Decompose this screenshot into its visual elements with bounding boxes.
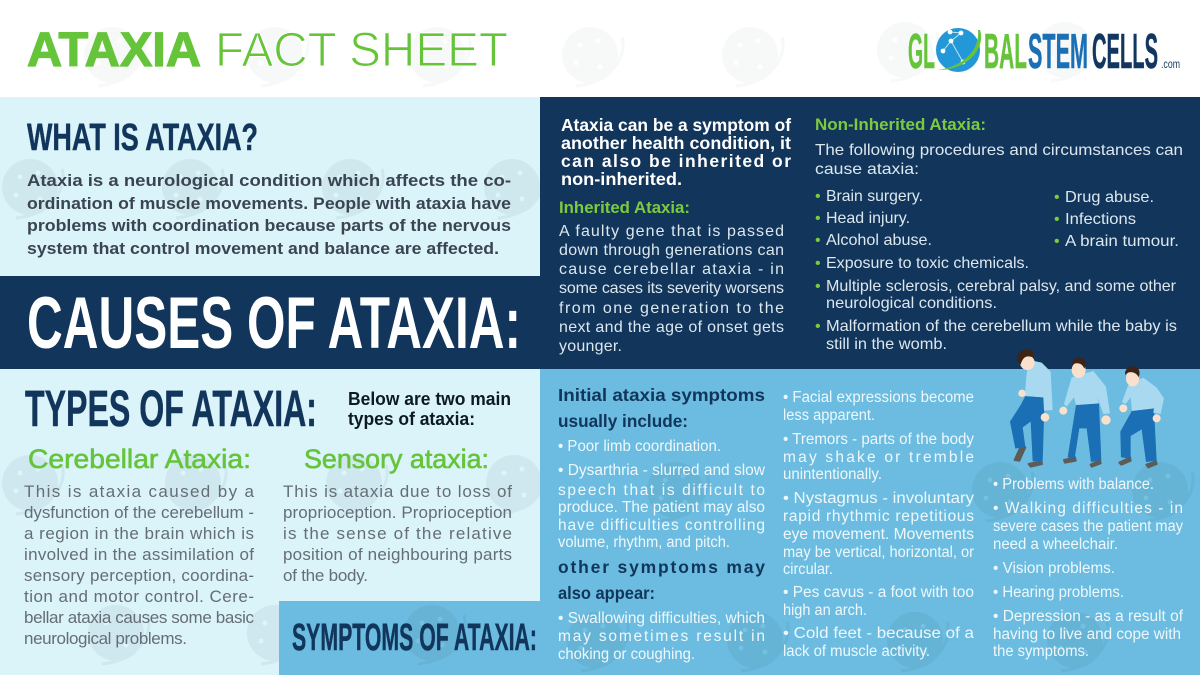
text: inherited ataxia: younger. [559,338,622,355]
list: other symptoms column two: • Cold feet - because of a [783,625,974,642]
text: cerebellar ataxia: neurological problems. [24,629,187,648]
title: ATAXIA [27,24,201,77]
list: other symptoms column three: the symptoms. [993,643,1089,660]
heading: causes of ataxia: CAUSES OF ATAXIA: [27,283,521,364]
text: definition: Ataxia is a neurological condition which affects the co- [27,171,511,190]
list: non-inherited causes: Drug abuse. [1065,189,1154,206]
illustration: three people with balance problems [1010,349,1164,467]
heading: cerebellar ataxia: Cerebellar Ataxia: [28,444,251,474]
list: initial symptoms [558,438,766,551]
text: definition [27,171,511,258]
logo: Global Stem Cells: GL [908,25,935,79]
text: definition: problems with coordination because parts of the nervous [27,216,511,235]
list: non-inherited causes: Alcohol abuse. [826,232,932,249]
heading: symptoms of ataxia: SYMPTOMS OF ATAXIA: [292,617,537,659]
text: inherited ataxia: next and the age of onset gets [559,319,784,336]
heading: initial symptoms: Initial ataxia symptoms [558,385,765,405]
text: cerebellar ataxia: sensory perception, coordina- [24,566,254,585]
heading: non-inherited ataxia: Non-Inherited Ataxia: [815,115,986,134]
logo: Global Stem Cells: .com [1161,57,1180,71]
text: intro: can also be inherited or [561,151,791,171]
list: other symptoms column two: high an arch. [783,602,867,619]
list: other symptoms column two: may shake or tremble [783,449,974,466]
heading: types of ataxia: TYPES OF ATAXIA: [25,380,317,437]
heading: other symptoms [558,557,765,603]
heading: inherited ataxia: Inherited Ataxia: [559,198,690,217]
text: sensory ataxia: This is ataxia due to loss of [283,482,512,501]
text: cerebellar ataxia: tion and motor control. Cere- [24,587,254,606]
list: other symptoms column two: • Nystagmus - involuntary [783,490,974,507]
list: other symptoms column two: • Tremors - parts of the body [783,431,974,448]
panel: symptoms heading [279,601,541,675]
text: definition: system that control movement and balance are affected. [27,239,499,258]
list: initial symptoms: have difficulties controlling [558,517,765,534]
list: non-inherited causes: Head injury. [826,210,910,227]
list: initial symptoms: • Dysarthria - slurred and slow [558,462,766,479]
list: other symptoms column three: having to live and cope with [993,626,1181,643]
list: non-inherited causes: Exposure to toxic chemicals. [826,255,1029,272]
heading: initial symptoms: usually include: [558,411,688,431]
list: non-inherited causes: still in the womb. [826,336,947,353]
logo: Global Stem Cells [908,25,1180,79]
text: inherited ataxia: cause cerebellar ataxia - in [559,261,784,278]
list: other symptoms column two: • Facial expressions become [783,389,974,406]
list: other symptoms column three: severe cases the patient may [993,518,1183,535]
text: non-inherited intro: The following procedures and circumstances can [815,142,1183,159]
text: two main types: types of ataxia: [348,409,475,429]
list: other symptoms column two: unintentionally. [783,466,882,483]
text: sensory ataxia: is the sense of the relative [283,524,512,543]
list: non-inherited causes [815,188,1179,353]
list: other symptoms column two: rapid rhythmic repetitious [783,508,974,525]
list: other symptoms column three: • Walking difficulties - in [993,500,1183,517]
heading: initial symptoms [558,385,765,431]
panel: causes of ataxia banner [0,276,541,369]
text: cerebellar ataxia: dysfunction of the cerebellum - [24,503,254,522]
list: other symptoms column one [558,610,765,663]
text: intro [561,115,791,189]
list: other symptoms column three: • Vision problems. [993,560,1115,577]
panel: header [0,0,1200,97]
list: other symptoms column three: need a wheelchair. [993,536,1118,553]
panel: what is ataxia [0,97,545,276]
text: inherited ataxia: down through generations can [559,242,784,259]
list: non-inherited causes: • [815,278,821,295]
list: initial symptoms: produce. The patient may also [558,499,765,516]
list: initial symptoms: speech that is difficult to [558,482,765,499]
list: other symptoms column two: • Pes cavus - a foot with too [783,584,974,601]
heading: other symptoms: other symptoms may [558,557,765,577]
list: other symptoms column three [993,476,1184,660]
list: non-inherited causes: • [815,188,821,205]
title: FACT SHEET [215,24,508,77]
list: other symptoms column three: • Problems with balance. [993,476,1154,493]
list: other symptoms column three: • Depression - as a result of [993,608,1184,625]
text: intro: Ataxia can be a symptom of [561,115,791,135]
list: initial symptoms: volume, rhythm, and pitch. [558,534,730,551]
figure: third person [1119,366,1164,467]
heading: what is ataxia: WHAT IS ATAXIA? [27,117,258,159]
list: non-inherited causes: • [1054,211,1060,228]
text: two main types: Below are two main [348,389,511,409]
figure: second person [1059,358,1111,467]
text: inherited ataxia [559,223,784,355]
text: intro: non-inherited. [561,169,682,189]
text: cerebellar ataxia: bellar ataxia causes some basic [24,608,254,627]
list: other symptoms column three: • Hearing problems. [993,584,1124,601]
text: inherited ataxia: from one generation to the [559,300,784,317]
list: other symptoms column two: may be vertical, horizontal, or [783,544,974,561]
text: cerebellar ataxia: a region in the brain which is [24,524,254,543]
text: intro: another health condition, it [561,133,791,153]
list: other symptoms column one: may sometimes result in [558,628,765,645]
list: non-inherited causes: Malformation of the cerebellum while the baby is [826,318,1177,335]
list: non-inherited causes: • [1054,233,1060,250]
list: non-inherited causes: Multiple sclerosis, cerebral palsy, and some other [826,278,1177,295]
text: cerebellar ataxia: involved in the assimilation of [24,545,254,564]
list: other symptoms column one: • Swallowing difficulties, which [558,610,765,627]
list: other symptoms column two: eye movement. Movements [783,526,974,543]
logo: Global Stem Cells: BAL [984,25,1027,79]
list: non-inherited causes: • [815,255,821,272]
figure: first person [1010,349,1053,467]
list: non-inherited causes: Brain surgery. [826,188,923,205]
list: non-inherited causes: Infections [1065,211,1136,228]
heading: other symptoms: also appear: [558,583,655,603]
text: sensory ataxia: of the body. [283,566,368,585]
text: non-inherited intro [815,142,1183,178]
text: cerebellar ataxia [24,482,255,648]
heading: sensory ataxia: Sensory ataxia: [304,444,489,474]
list: initial symptoms: • Poor limb coordination. [558,438,721,455]
list: non-inherited causes: • [815,232,821,249]
text: definition: ordination of muscle movements. People with ataxia have [27,194,511,213]
list: non-inherited causes: A brain tumour. [1065,233,1179,250]
text: two main types [348,389,511,429]
list: non-inherited causes: • [815,318,821,335]
title [27,24,508,77]
list: non-inherited causes: • [1054,189,1060,206]
list: other symptoms column two: circular. [783,561,833,578]
panel: symptoms [540,369,1200,675]
text: sensory ataxia: proprioception. Proprioception [283,503,512,522]
text: sensory ataxia: position of neighbouring parts [283,545,512,564]
list: non-inherited causes: • [815,210,821,227]
panel: causes details [540,97,1200,369]
list: other symptoms column two: less apparent. [783,407,875,424]
text: inherited ataxia: some cases its severity worsens [559,280,784,297]
text: sensory ataxia [283,482,512,585]
list: other symptoms column two [783,389,974,660]
logo: Global Stem Cells: STEM [1028,25,1088,79]
icon: globe [936,28,981,72]
text: inherited ataxia: A faulty gene that is passed [559,223,784,240]
text: cerebellar ataxia: This is ataxia caused by a [24,482,255,501]
list: other symptoms column one: choking or coughing. [558,646,695,663]
list: other symptoms column two: lack of muscle activity. [783,643,930,660]
text: non-inherited intro: cause ataxia: [815,161,919,178]
panel: types of ataxia [0,369,547,675]
list: non-inherited causes: neurological conditions. [826,295,997,312]
